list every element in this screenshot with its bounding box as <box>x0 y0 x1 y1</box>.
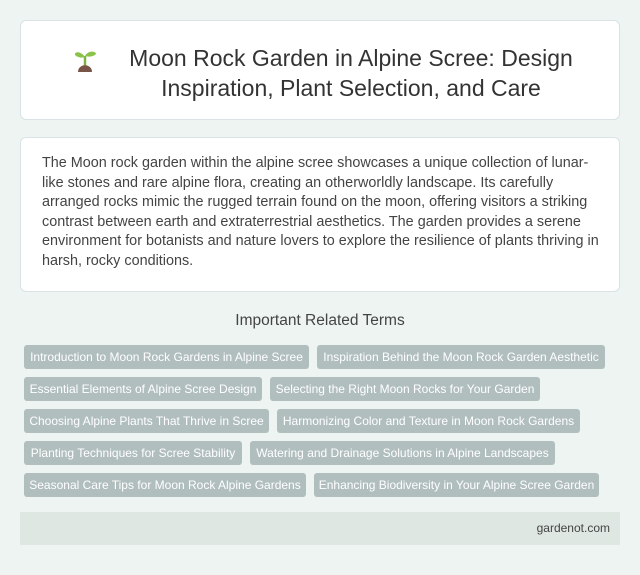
tags: Seasonal Care Tips for Moon Rock Alpine Gardens <box>29 478 301 492</box>
icon: sprout <box>74 52 96 72</box>
tags: Harmonizing Color and Texture in Moon Rock Gardens <box>283 414 574 428</box>
tags: Choosing Alpine Plants That Thrive in Scree <box>29 414 264 428</box>
description card <box>20 137 620 292</box>
tags: Watering and Drainage Solutions in Alpine Landscapes <box>256 446 549 460</box>
tags: Introduction to Moon Rock Gardens in Alpine Scree <box>30 350 303 364</box>
footer <box>20 512 620 545</box>
tags: Essential Elements of Alpine Scree Design <box>30 382 256 396</box>
tags: Enhancing Biodiversity in Your Alpine Scree Garden <box>319 478 594 492</box>
heading: related terms: Important Related Terms <box>235 312 405 329</box>
description text: The Moon rock garden within the alpine scree showcases a unique collection of lunar-like stones and rare alpine flora, creating an otherworldly landscape. Its carefully arranged rocks mimic the rugged terrain found on the moon, offering visitors a striking contrast between earth and extraterrestrial aesthetics. The garden provides a serene environment for botanists and nature lovers to explore the resilience of plants thriving in harsh, rocky conditions. <box>42 155 599 269</box>
tags: Inspiration Behind the Moon Rock Garden Aesthetic <box>323 350 599 364</box>
tags <box>24 345 605 497</box>
footer source: gardenot.com <box>537 521 610 535</box>
tags: Planting Techniques for Scree Stability <box>31 446 235 460</box>
tags: Selecting the Right Moon Rocks for Your Garden <box>276 382 534 396</box>
title card <box>20 20 620 120</box>
title: Moon Rock Garden in Alpine Scree: Design Inspiration, Plant Selection, and Care <box>129 45 573 101</box>
